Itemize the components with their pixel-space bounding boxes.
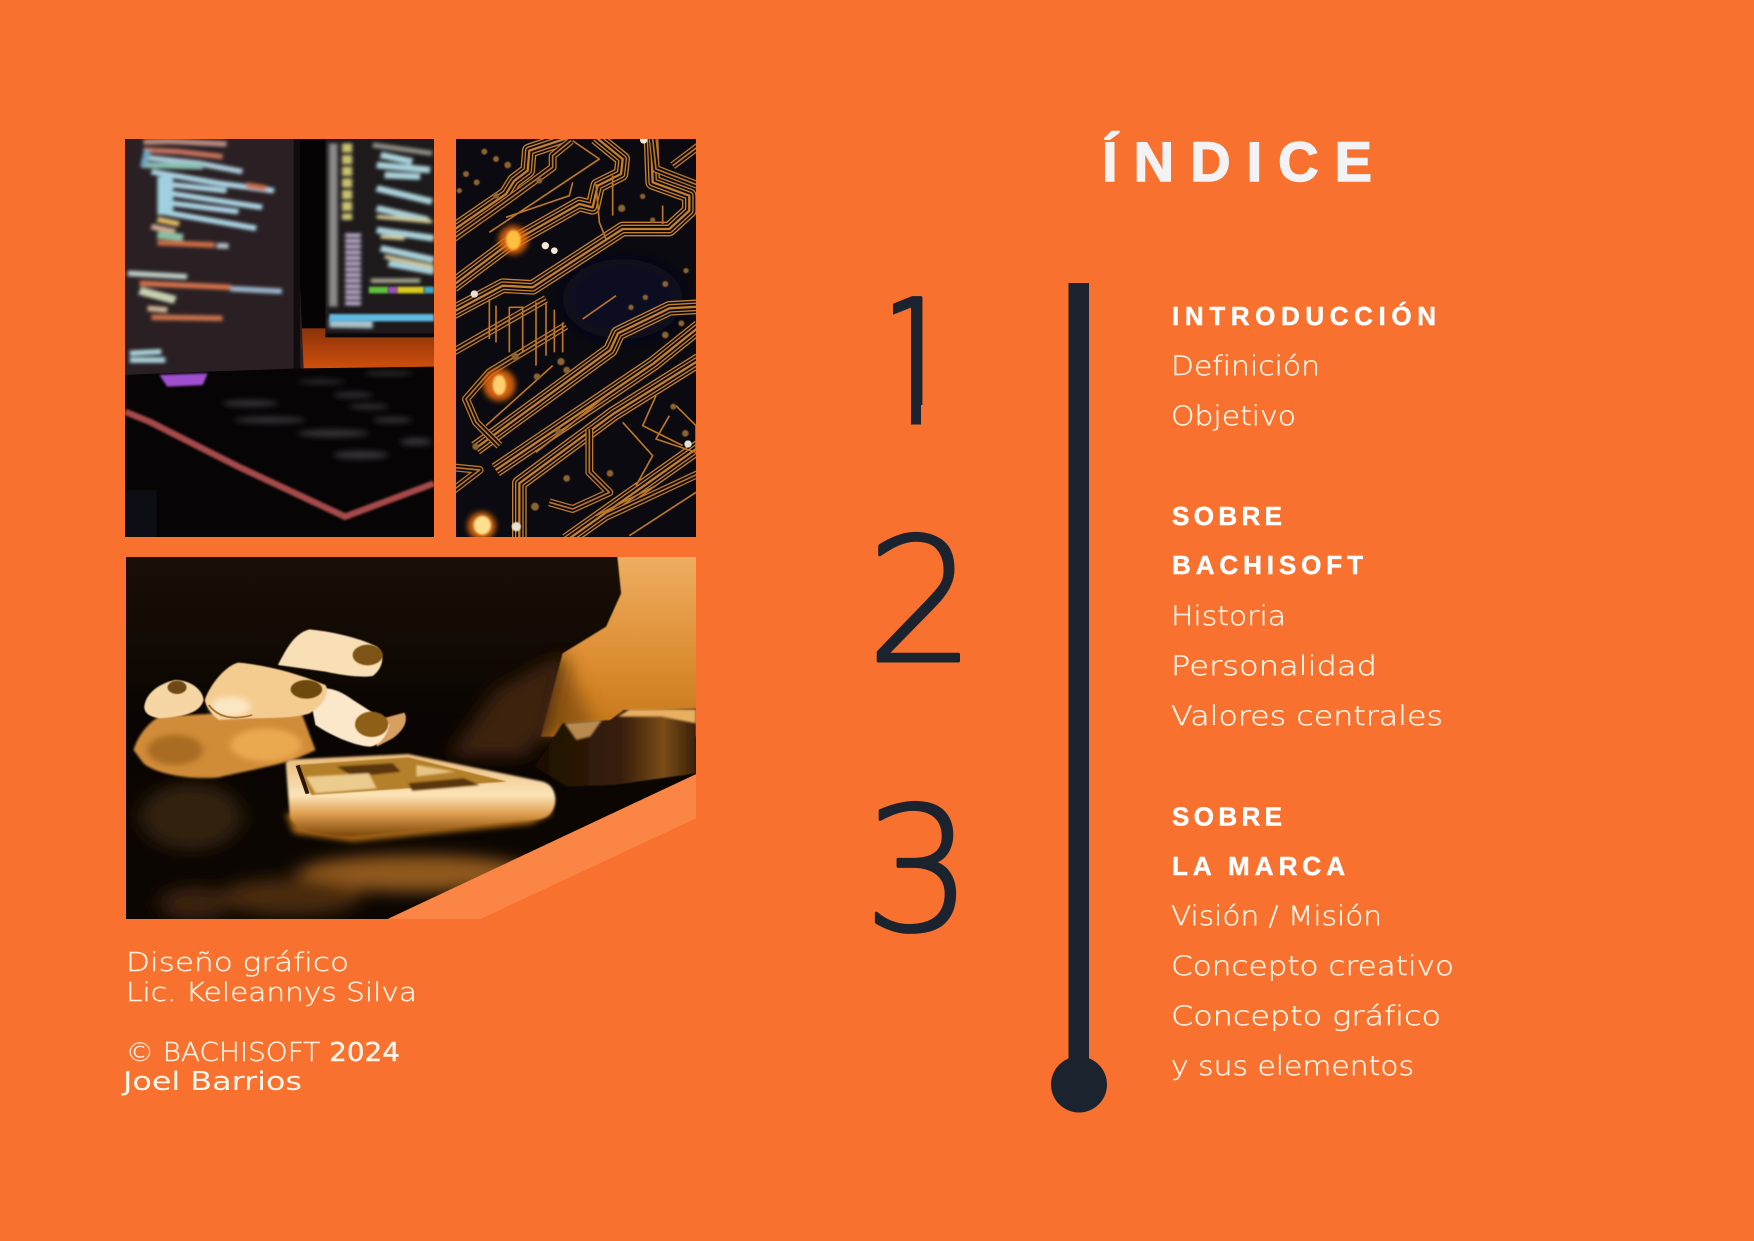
title: ÍNDICE <box>1102 130 1372 193</box>
table reflection <box>140 783 535 920</box>
item: concepto creativo: Concepto creativo <box>1171 951 1454 982</box>
keyboard edge light <box>125 412 434 537</box>
heading: la marca: LA MARCA <box>1172 851 1345 881</box>
index section 1 <box>1171 301 1436 432</box>
solder pads <box>457 149 689 511</box>
watch strap <box>535 708 696 787</box>
section numbers <box>874 296 960 934</box>
infographic page <box>121 130 1452 1112</box>
credit: designer name: Lic. Keleannys Silva <box>126 978 417 1008</box>
item: y sus elementos: y sus elementos <box>1171 1051 1414 1082</box>
orange wall glow <box>300 328 434 378</box>
index section 3 <box>1171 802 1454 1082</box>
credit: author: Joel Barrios <box>121 1067 302 1097</box>
wall <box>448 555 697 757</box>
item: historia: Historia <box>1171 601 1286 632</box>
index section 2 <box>1171 501 1443 732</box>
credit: design: Diseño gráfico <box>126 948 349 978</box>
left monitor <box>125 139 304 377</box>
photo: code monitors and keyboard <box>125 139 434 537</box>
item: objetivo: Objetivo <box>1171 401 1296 432</box>
heading: introducción: INTRODUCCIÓN <box>1172 301 1436 331</box>
hand <box>134 629 406 778</box>
number 3: 3 <box>863 770 973 971</box>
credits text block <box>121 948 417 1097</box>
right monitor <box>325 139 434 337</box>
heading: sobre: SOBRE <box>1172 501 1282 531</box>
heading: sobre: SOBRE <box>1172 802 1282 832</box>
timeline bar with end dot <box>1051 283 1107 1112</box>
number 1: 1 <box>859 263 969 464</box>
heading: bachisoft: BACHISOFT <box>1172 550 1363 580</box>
item: definición: Definición <box>1171 351 1320 382</box>
item: valores centrales: Valores centrales <box>1171 701 1443 732</box>
photo: circuit board <box>456 139 696 537</box>
copyright line: © BACHISOFT 2024 <box>126 1038 400 1068</box>
keyboard <box>125 367 434 537</box>
circuit traces <box>453 137 699 540</box>
number 2: 2 <box>866 501 976 702</box>
smartphone <box>286 754 555 842</box>
photo: hand over smartphone <box>126 557 696 919</box>
LED glows <box>468 136 692 540</box>
item: concepto gráfico: Concepto gráfico <box>1171 1001 1441 1032</box>
item: personalidad: Personalidad <box>1171 651 1377 682</box>
item: visión / misión: Visión / Misión <box>1171 901 1382 932</box>
diagonal accent band <box>385 773 699 920</box>
